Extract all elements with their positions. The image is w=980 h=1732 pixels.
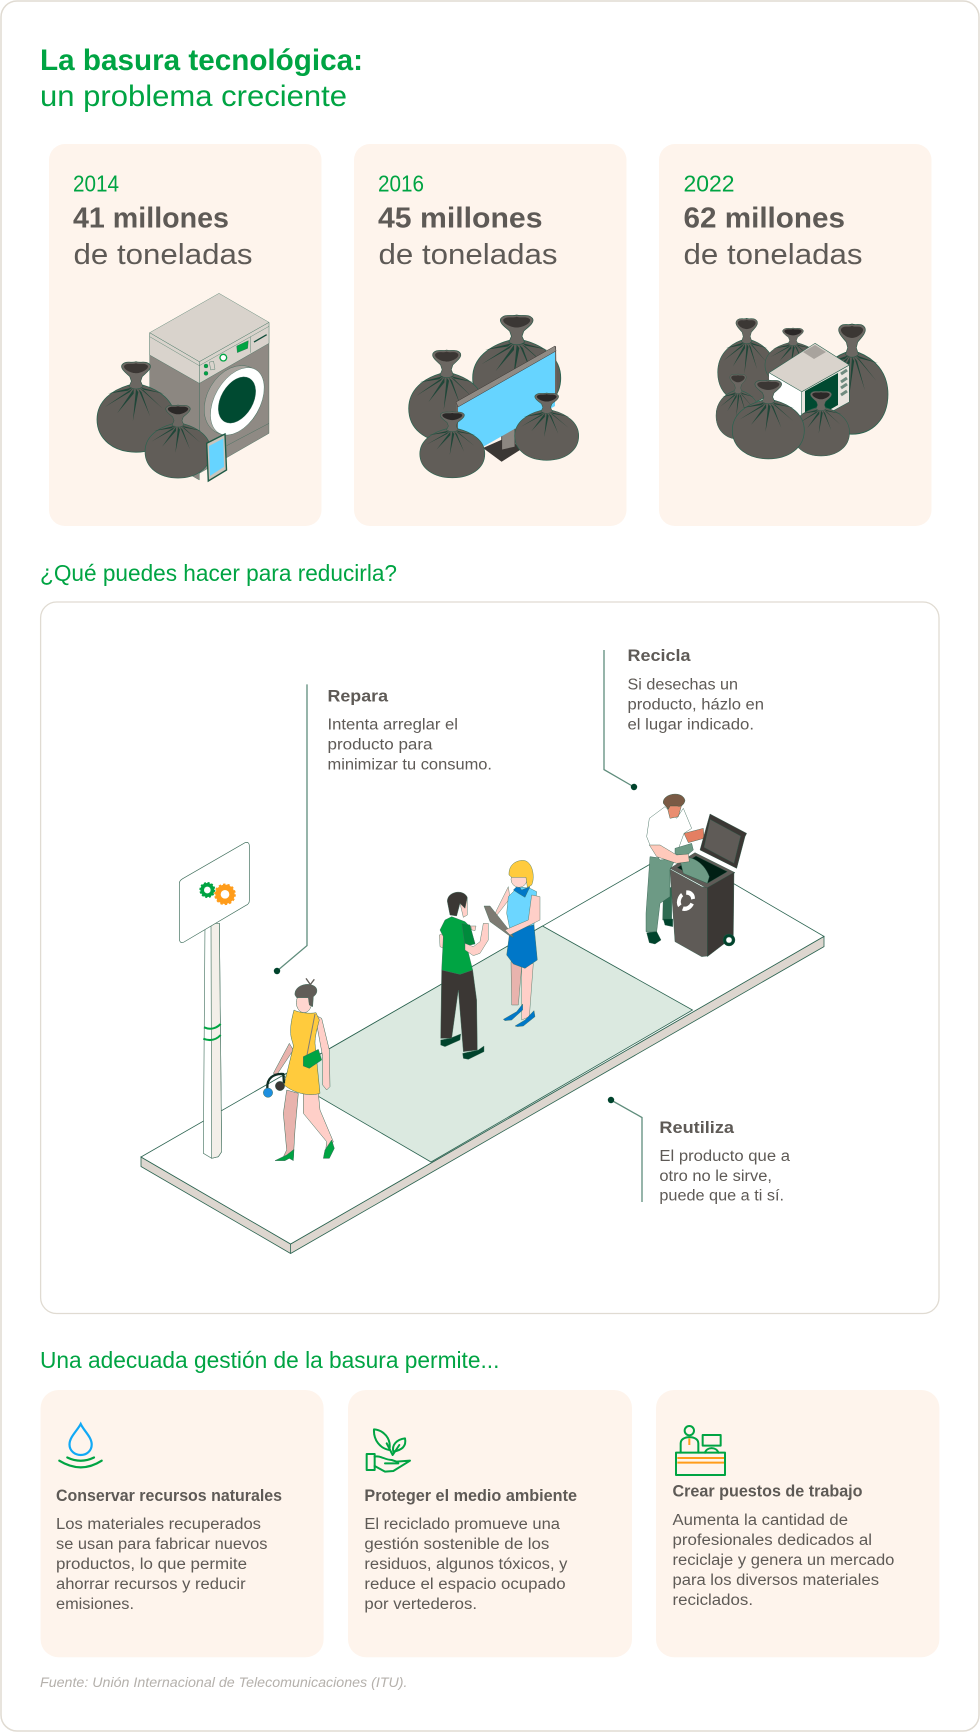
- callout: Repara: producto para: [328, 736, 433, 754]
- green zone: [283, 926, 692, 1162]
- illustration: monitor and bags: [409, 315, 579, 478]
- sign post with gears: [179, 842, 249, 1158]
- panel: actions scene: [41, 602, 939, 1314]
- man and woman with tablet: [439, 860, 540, 1059]
- callout: Reutiliza: Reutiliza: [659, 1119, 735, 1137]
- callout: Repara: Repara: [328, 688, 389, 706]
- title: La basura tecnológica:: [40, 44, 363, 77]
- title: [40, 44, 363, 113]
- text: crear puestos: profesionales dedicados al: [672, 1532, 872, 1549]
- isometric platform: [141, 850, 824, 1254]
- callout: Recicla: [604, 647, 764, 790]
- text: crear puestos: Crear puestos de trabajo: [672, 1483, 862, 1501]
- panel: 2022: [659, 144, 932, 526]
- text: proteger: Proteger el medio ambiente: [364, 1487, 577, 1505]
- panel: 2016: [354, 144, 626, 526]
- panel: puestos de trabajo: [656, 1390, 939, 1657]
- panel: proteger medio ambiente: [348, 1390, 632, 1657]
- callout: Repara: Intenta arreglar el: [328, 716, 458, 733]
- text: conservar: Los materiales recuperados: [56, 1516, 261, 1533]
- text: crear puestos: reciclaje y genera un mercado: [672, 1552, 894, 1569]
- text: proteger: [364, 1487, 577, 1613]
- icon: hand with plant: [367, 1429, 410, 1472]
- callout: Reutiliza: [608, 1097, 790, 1204]
- callout: Recicla: Si desechas un: [628, 676, 738, 694]
- text: proteger: reduce el espacio ocupado: [364, 1576, 566, 1593]
- text: proteger: residuos, algunos tóxicos, y: [364, 1556, 568, 1573]
- icon: water drop: [59, 1424, 102, 1467]
- text: 2022 figure: [684, 170, 862, 271]
- illustration: microwave and bags: [716, 318, 888, 459]
- text: 2022 figure: 2022: [684, 170, 734, 196]
- text: 2022 figure: 62 millones: [684, 202, 845, 234]
- heading: proper management: Una adecuada gestión de la basura permite...: [40, 1347, 499, 1373]
- text: crear puestos: Aumenta la cantidad de: [672, 1512, 848, 1529]
- text: crear puestos: [672, 1483, 894, 1609]
- text: 2016 figure: [378, 170, 558, 271]
- text: 2016 figure: 45 millones: [378, 202, 542, 234]
- callout: Reutiliza: puede que a ti sí.: [659, 1188, 784, 1204]
- text: 2016 figure: 2016: [378, 170, 424, 196]
- text: 2016 figure: de toneladas: [378, 239, 558, 271]
- text: conservar: se usan para fabricar nuevos: [56, 1536, 268, 1553]
- text: conservar: [56, 1487, 282, 1613]
- callout: Repara: minimizar tu consumo.: [328, 756, 492, 773]
- text: conservar: emisiones.: [56, 1596, 134, 1613]
- callout: Reutiliza: otro no le sirve,: [659, 1168, 772, 1185]
- text: crear puestos: reciclados.: [672, 1592, 753, 1609]
- callout: Recicla: Recicla: [628, 647, 691, 665]
- source note: Fuente: Unión Internacional de Telecomunicaciones (ITU).: [40, 1675, 408, 1690]
- icon: worker at desk: [676, 1426, 725, 1475]
- woman in yellow dress: [263, 978, 334, 1161]
- callout: Reutiliza: El producto que a: [659, 1148, 790, 1165]
- text: proteger: por vertederos.: [364, 1596, 477, 1613]
- text: 2014 figure: de toneladas: [74, 239, 253, 271]
- text: 2014 figure: 2014: [73, 170, 119, 196]
- callout: Recicla: producto, házlo en: [628, 696, 764, 713]
- text: crear puestos: para los diversos materiales: [672, 1572, 879, 1589]
- text: 2022 figure: de toneladas: [684, 239, 862, 271]
- text: conservar: productos, lo que permite: [56, 1556, 247, 1573]
- title: un problema creciente: [40, 80, 347, 113]
- text: proteger: gestión sostenible de los: [364, 1536, 550, 1553]
- man with recycling bin: [646, 794, 747, 957]
- callout: Recicla: el lugar indicado.: [628, 716, 754, 733]
- panel: 2014: [49, 144, 322, 526]
- text: conservar: ahorrar recursos y reducir: [56, 1576, 246, 1593]
- illustration: washing machine, bags and phone: [97, 293, 275, 481]
- text: proteger: El reciclado promueve una: [364, 1516, 560, 1533]
- text: 2014 figure: 41 millones: [73, 202, 229, 234]
- callout: Repara: [274, 684, 492, 974]
- panel: conservar recursos: [41, 1390, 324, 1657]
- text: conservar: Conservar recursos naturales: [56, 1487, 282, 1505]
- heading: what can you do: ¿Qué puedes hacer para reducirla?: [40, 560, 397, 586]
- text: 2014 figure: [73, 170, 253, 271]
